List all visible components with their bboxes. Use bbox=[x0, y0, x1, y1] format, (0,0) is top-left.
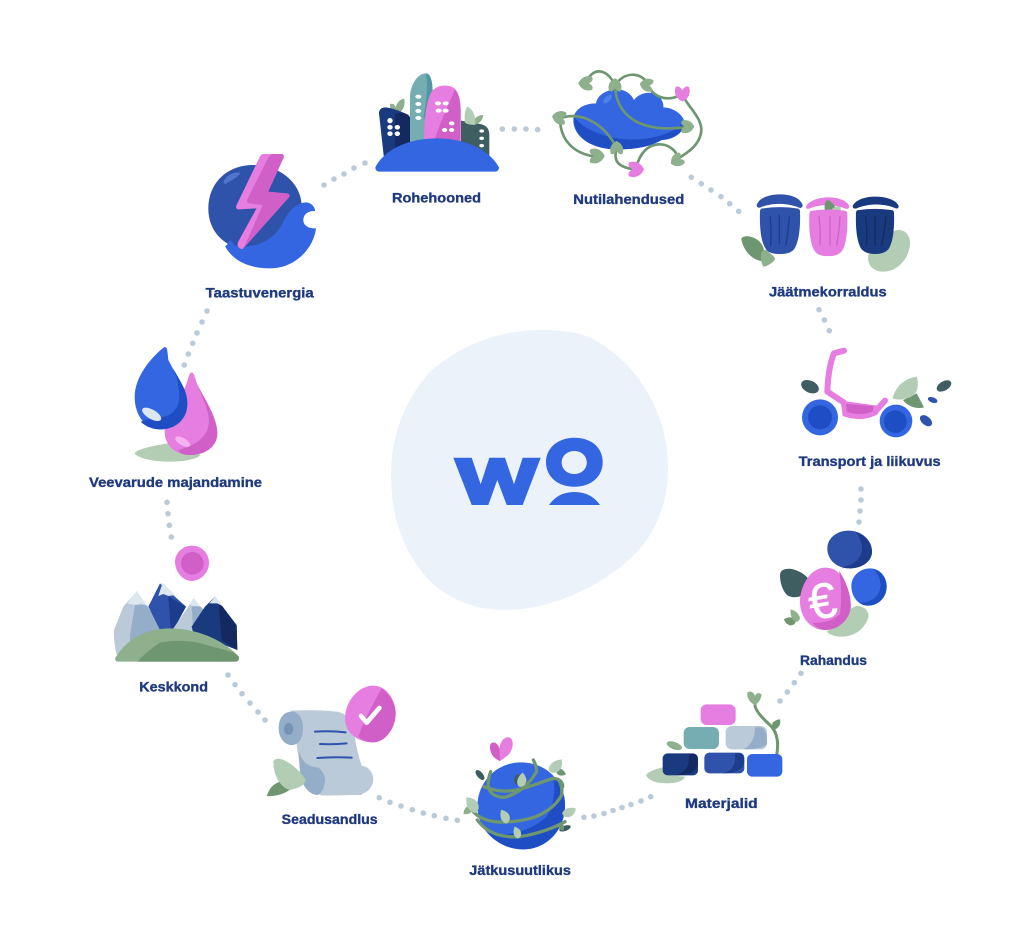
label: Rohehooned: Rohehooned bbox=[392, 190, 481, 206]
dotted connectors bbox=[164, 126, 864, 823]
logo bbox=[453, 438, 603, 505]
icon: waste bins bbox=[741, 194, 910, 272]
icon: euro stones bbox=[780, 531, 887, 637]
label: Seadusandlus: Seadusandlus bbox=[282, 811, 378, 827]
icon: renewable energy bolt and wave bbox=[208, 154, 316, 268]
icon: scooter bbox=[799, 351, 953, 437]
icon: cloud with vines bbox=[551, 71, 701, 177]
icon: bricks with sprout bbox=[646, 691, 782, 783]
label: Keskkond: Keskkond bbox=[139, 679, 208, 695]
label: Jäätmekorraldus: Jäätmekorraldus bbox=[769, 284, 887, 300]
label: Veevarude majandamine: Veevarude majandamine bbox=[89, 474, 262, 490]
label: Taastuvenergia: Taastuvenergia bbox=[206, 284, 314, 300]
central blob bbox=[391, 330, 668, 610]
label: Rahandus: Rahandus bbox=[800, 652, 867, 668]
icon: mountains and sun bbox=[114, 546, 239, 662]
label: Jätkusuutlikus: Jätkusuutlikus bbox=[469, 862, 571, 878]
label: Materjalid: Materjalid bbox=[685, 795, 758, 811]
label: Nutilahendused: Nutilahendused bbox=[573, 191, 684, 207]
icon: legal scroll with check badge bbox=[267, 686, 396, 796]
icon: water drops bbox=[134, 347, 217, 462]
icon: globe with vines bbox=[463, 737, 576, 849]
label: Transport ja liikuvus: Transport ja liikuvus bbox=[799, 453, 941, 469]
icon: euro stones: € bbox=[804, 571, 841, 631]
icon: green buildings bbox=[375, 73, 499, 172]
